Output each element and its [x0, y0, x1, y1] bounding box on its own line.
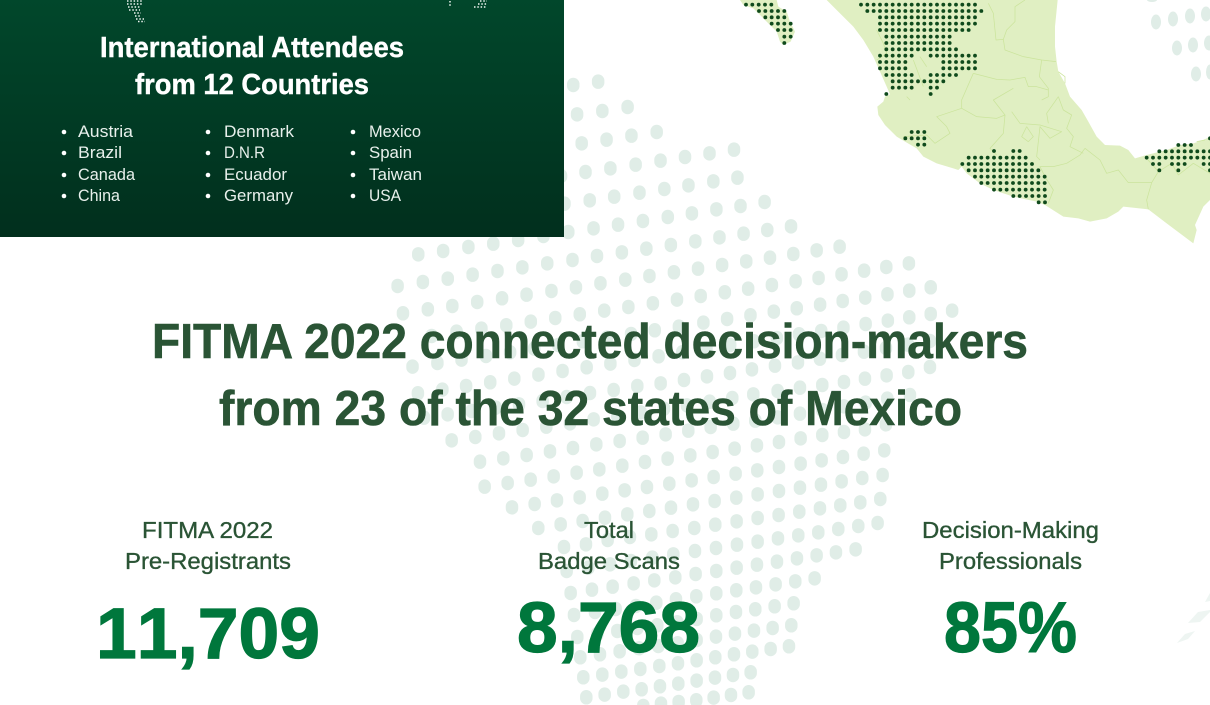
main heading: FITMA 2022 connected decision-makers — [152, 315, 1028, 369]
dotted map fragment: top right — [1147, 0, 1210, 82]
stat: decision-making professionals: Decision-Making — [922, 517, 1099, 543]
stat: decision-making professionals: 85% — [944, 589, 1077, 668]
stat: pre-registrants: FITMA 2022 — [142, 517, 273, 543]
country list: column 2: Ecuador — [224, 165, 287, 184]
country list: column 3: Spain — [369, 143, 412, 162]
panel: international attendees — [0, 0, 564, 237]
Baja California landmass — [740, 0, 795, 45]
country list: column 2: Denmark — [224, 122, 295, 141]
stat: pre-registrants — [96, 517, 320, 674]
stat: badge scans: Total — [584, 517, 634, 543]
country list: column 3: Mexico — [369, 122, 421, 141]
country list: column 2: Germany — [224, 186, 293, 205]
country list: column 3: Taiwan — [369, 165, 422, 184]
stat: badge scans — [517, 517, 700, 668]
dotted map of South America (background) — [398, 81, 952, 705]
dotted map fragment: bottom right — [1177, 593, 1210, 643]
country list: column 3: USA — [369, 186, 402, 205]
country list: column 2: D.N.R — [224, 143, 265, 162]
country list: column 1: China — [78, 186, 121, 205]
panel heading: International Attendees — [100, 32, 404, 64]
country list: column 1 — [62, 122, 136, 205]
country list: column 1: Canada — [78, 165, 136, 184]
country list: column 2 — [206, 122, 295, 205]
mainland Mexico landmass — [827, 0, 1210, 243]
stat: decision-making professionals: Professionals — [939, 548, 1082, 574]
stat: badge scans: Badge Scans — [538, 548, 680, 574]
stat: decision-making professionals — [922, 517, 1099, 668]
main heading: from 23 of the 32 states of Mexico — [219, 382, 962, 436]
stat: pre-registrants: 11,709 — [96, 595, 320, 674]
main heading — [152, 315, 1028, 436]
highlighted states: dark dot pattern — [746, 5, 1210, 202]
panel heading — [100, 32, 404, 101]
stat: pre-registrants: Pre-Registrants — [125, 548, 291, 574]
stat: badge scans: 8,768 — [517, 589, 700, 668]
country list: column 1: Austria — [78, 122, 134, 141]
map of Mexico — [740, 0, 1210, 243]
icon: white dotted map fragments — [127, 1, 487, 22]
country list: column 1: Brazil — [78, 143, 122, 162]
state borders — [877, 0, 1210, 209]
panel heading: from 12 Countries — [135, 69, 369, 101]
country list: column 3 — [351, 122, 422, 205]
